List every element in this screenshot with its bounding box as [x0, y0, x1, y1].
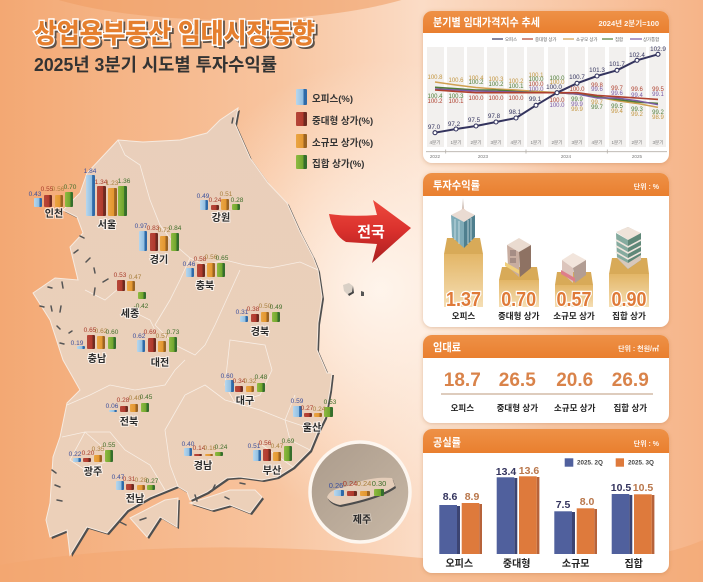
region: 경북: 0.50: [259, 303, 272, 310]
category labels: 오피스: [452, 311, 475, 321]
region: 울산: 0.27: [301, 405, 314, 412]
legend: 오피스(%): [312, 94, 353, 105]
region: 부산: 부산: [263, 464, 281, 477]
bar chart: 10.5: [633, 482, 653, 494]
region: 부산: 0.51: [248, 443, 261, 450]
region: 충북: 0.56: [205, 254, 218, 261]
region: 세종: [114, 272, 149, 320]
bar chart: 8.0: [580, 496, 594, 508]
legend: 집합 상가(%): [312, 158, 364, 170]
region: 경북: 0.31: [236, 309, 249, 316]
region: 대전: 대전: [151, 356, 169, 369]
region: 광주: 0.22: [69, 451, 82, 458]
chart value labels: 100.0: [569, 87, 585, 93]
panel: 제주 inset: 0.24: [343, 479, 357, 488]
value: 중대형 상가: 0.70: [501, 289, 536, 311]
chart value labels: 101.3: [589, 67, 605, 74]
chart value labels: 99.9: [571, 97, 583, 103]
region: 부산: 0.56: [259, 440, 272, 447]
chart value labels: 100.0: [528, 82, 544, 88]
region: 충남: [71, 327, 119, 365]
bar legend: 2025. 3Q: [628, 460, 654, 466]
region: 충북: 0.46: [183, 261, 196, 268]
chart legend: 집합: [615, 36, 623, 42]
chart value labels: 100.0: [549, 98, 565, 104]
value: 소규모 상가: 0.57: [556, 289, 592, 311]
category labels: 소규모 상가: [553, 311, 595, 321]
chart value labels: 99.7: [591, 105, 603, 111]
region: 경기: 0.84: [169, 225, 182, 232]
chart value labels: 100.0: [508, 96, 524, 102]
category labels: 오피스: [451, 403, 474, 413]
region: 강원: 0.28: [231, 197, 244, 204]
region: 경기: 0.72: [158, 227, 171, 234]
chart value labels: 100.1: [528, 73, 544, 79]
quarter axis: [426, 139, 667, 159]
chart value labels: 100.2: [427, 99, 443, 105]
region: 전북: 전북: [120, 416, 138, 428]
panel: 제주 inset: 0.30: [372, 479, 386, 488]
heading: 투자수익률: [433, 179, 480, 192]
category labels: 집합 상가: [613, 403, 647, 413]
chart value labels: 99.6: [631, 87, 643, 93]
region: 서울: 1.36: [118, 178, 131, 185]
region: 광주: [69, 442, 116, 478]
region: 울산: 울산: [303, 421, 321, 434]
chart value labels: 99.4: [611, 109, 623, 115]
icon: office tower: [451, 198, 475, 248]
chart value labels: 97.0: [428, 124, 441, 131]
category labels: 소규모 상가: [554, 403, 596, 413]
quarter axis: 4분기: [510, 139, 522, 146]
rent values: 18.7: [444, 370, 481, 391]
unit note: 단위 : %: [634, 439, 660, 448]
unit note: 단위 : %: [634, 182, 660, 191]
region: 전북: 0.28: [117, 397, 130, 404]
region: 충남: 0.62: [95, 328, 108, 335]
chart value labels: 99.2: [631, 112, 643, 118]
chart value labels: 99.8: [591, 83, 603, 89]
arrow: 전국: 전국: [357, 224, 385, 241]
bar chart: 7.5: [556, 499, 570, 511]
region: 경남: [182, 441, 228, 472]
region: 경남: 0.16: [204, 445, 217, 452]
region: 서울: 1.34: [95, 179, 108, 186]
panel: 투자수익률: [423, 173, 669, 327]
rent values: [444, 370, 649, 391]
region: 전북: [106, 394, 153, 428]
category labels: 집합 상가: [612, 311, 646, 321]
chart value labels: 100.4: [427, 94, 443, 100]
chart value labels: 99.9: [571, 107, 583, 113]
region: 전남: 0.47: [112, 474, 125, 481]
region: 대전: 0.69: [144, 329, 157, 336]
quarter axis: 3분기: [571, 139, 583, 146]
chart value labels: 99.5: [652, 87, 664, 93]
region: 경북: 경북: [251, 326, 269, 338]
quarter axis: 2024: [561, 154, 572, 159]
region: 전북: 0.45: [140, 394, 153, 401]
region: 인천: 0.55: [41, 186, 54, 193]
region: 대전: [133, 329, 180, 369]
rent values: 20.6: [556, 370, 593, 391]
region: 서울: [84, 168, 131, 231]
quarter axis: 1분기: [450, 139, 462, 146]
quarter axis: 2022: [430, 154, 441, 159]
panel: 공실률: [423, 429, 669, 573]
region: 부산: 0.69: [282, 438, 295, 445]
quarter axis: 2분기: [551, 139, 563, 146]
chart value labels: 100.8: [427, 75, 443, 81]
chart value labels: 99.2: [652, 110, 664, 116]
chart value labels: 100.1: [508, 84, 524, 90]
region: 경북: 0.49: [270, 304, 283, 311]
region: 서울: 1.23: [106, 180, 119, 187]
region: 대구: 0.32: [244, 378, 257, 385]
arrow: 전국: [329, 200, 411, 263]
rent values: 26.5: [499, 370, 536, 391]
bar chart: 8.6: [443, 491, 457, 503]
region: 충북: 충북: [196, 280, 214, 292]
chart legend: [492, 36, 659, 43]
chart value labels: [427, 46, 666, 131]
title: 상업용부동산 임대시장동향: [36, 21, 317, 51]
category labels: [452, 311, 646, 321]
region: 울산: [291, 398, 337, 434]
chart legend: 소규모 상가: [576, 36, 597, 43]
chart value labels: 102.4: [629, 52, 645, 59]
region: 부산: [248, 438, 295, 477]
title: 상업용부동산 임대시장동향: [34, 19, 315, 49]
chart value labels: 100.2: [468, 80, 484, 86]
unit note: 2024년 2분기=100: [598, 18, 659, 28]
panel: 임대료: [423, 335, 669, 423]
panel: 제주 inset: 제주: [353, 513, 371, 526]
bar chart: 13.4: [496, 466, 516, 478]
region: 강원: 강원: [212, 211, 230, 224]
chart value labels: 99.1: [652, 92, 664, 98]
chart value labels: 100.2: [488, 82, 504, 88]
category labels: 중대형: [503, 557, 531, 570]
region: 부산: 0.47: [271, 443, 284, 450]
region: 경기: 경기: [150, 253, 168, 266]
rent values: 26.9: [612, 370, 649, 391]
chart value labels: 100.0: [546, 84, 562, 91]
chart value labels: 100.4: [468, 76, 484, 82]
icon: mid-size shop building: [505, 238, 531, 277]
category labels: 집합: [624, 557, 643, 570]
chart value labels: 99.4: [631, 93, 643, 99]
region: 경북: 0.38: [247, 306, 260, 313]
region: 강원: 0.51: [220, 191, 233, 198]
region: 충남: 0.65: [84, 327, 97, 334]
line chart: [433, 52, 660, 135]
bar legend: 2025. 2Q: [577, 460, 603, 466]
region: 충북: [183, 254, 229, 292]
chart value labels: 100.0: [488, 96, 504, 102]
region: 전남: 전남: [126, 492, 144, 505]
icon: collective building: [616, 227, 641, 269]
icon: Ulleung and Dokdo islands: [343, 283, 364, 296]
bar chart: [439, 465, 654, 554]
bar legend: [565, 458, 654, 467]
chart value labels: 100.0: [528, 87, 544, 93]
heading: 임대료: [433, 340, 461, 354]
region: 전남: 0.27: [146, 478, 159, 485]
region: 세종: 세종: [121, 307, 139, 320]
bar chart: 13.6: [519, 465, 539, 477]
chart value labels: 100.1: [448, 99, 464, 105]
legend: [296, 89, 373, 170]
category labels: 소규모: [562, 558, 590, 570]
region: 대구: 0.34: [233, 378, 246, 385]
chart value labels: 98.1: [509, 109, 522, 116]
chart legend: 중대형 상가: [535, 36, 556, 43]
chart value labels: 100.6: [448, 78, 464, 84]
chart value labels: 97.5: [468, 117, 481, 124]
region: 세종: 0.47: [129, 274, 142, 281]
chart value labels: 100.0: [549, 80, 565, 86]
map of South Korea: [33, 108, 334, 557]
chart value labels: 100.7: [569, 74, 585, 81]
chart value labels: 99.6: [591, 87, 603, 93]
chart legend: 상가통합: [643, 36, 659, 43]
region: 광주: 0.55: [103, 442, 116, 449]
region: 경기: 0.97: [135, 223, 148, 230]
category labels: 중대형 상가: [497, 403, 538, 413]
panel: 분기별 임대가격지수 추세: [423, 11, 669, 163]
heading: 공실률: [433, 436, 461, 449]
region: 경남: 0.40: [182, 441, 195, 448]
region: 경북: [236, 303, 283, 338]
icon: small shop building: [561, 253, 586, 283]
region: 대전: 0.73: [167, 329, 180, 336]
bar chart: 8.9: [465, 491, 479, 503]
region: 광주: 0.20: [82, 450, 95, 457]
region: 울산: 0.53: [324, 399, 337, 406]
chart value labels: 99.9: [571, 102, 583, 108]
chart value labels: 101.7: [609, 61, 625, 68]
region: 충북: 0.58: [194, 256, 207, 263]
chart value labels: 100.0: [549, 103, 565, 109]
region: 경남: 0.24: [215, 444, 228, 451]
quarter axis: 4분기: [591, 139, 603, 146]
subtitle: 2025년 3분기 시도별 투자수익률: [34, 55, 277, 75]
region: 세종: -0.42: [134, 303, 149, 310]
region: 충북: 0.65: [216, 255, 229, 262]
region: 서울: 1.84: [84, 168, 97, 175]
value: 오피스: 1.37: [446, 289, 481, 311]
region: 광주: 0.35: [92, 446, 105, 453]
chart value labels: 97.2: [448, 121, 461, 128]
chart value labels: 100.3: [488, 77, 504, 83]
quarter axis: 4분기: [429, 139, 441, 146]
region: 서울: 서울: [98, 218, 116, 231]
title: 상업용부동산 임대시장동향: [34, 19, 315, 49]
heading: 분기별 임대가격지수 추세: [433, 15, 540, 29]
region: 경기: [135, 223, 182, 266]
region: 전북: 0.06: [106, 403, 119, 410]
chart value labels: 100.0: [549, 76, 565, 82]
region: 경기: 0.83: [147, 225, 160, 232]
chart value labels: 100.0: [528, 77, 544, 83]
chart value labels: 99.1: [529, 96, 542, 103]
podiums: [444, 238, 649, 307]
region: 전남: 0.31: [123, 476, 136, 483]
region: 전남: [112, 474, 159, 505]
legend: 소규모 상가(%): [312, 137, 373, 149]
chart value labels: 100.0: [468, 96, 484, 102]
category labels: [451, 403, 647, 413]
quarter axis: 2분기: [631, 139, 643, 146]
category labels: [445, 557, 643, 570]
chart value labels: 102.9: [650, 46, 666, 53]
region: 전북: 0.40: [129, 395, 142, 402]
chart value labels: 100.2: [508, 79, 524, 85]
region: 강원: [197, 191, 244, 224]
chart value labels: 99.7: [591, 100, 603, 106]
chart value labels: 99.6: [611, 91, 623, 97]
region: 강원: 0.49: [197, 193, 210, 200]
region: 충남: 0.19: [71, 340, 84, 347]
chart value labels: 99.3: [631, 107, 643, 113]
panel: 제주 inset: [310, 442, 410, 542]
region: 경남: 0.14: [193, 445, 206, 452]
region: 충남: 0.60: [106, 329, 119, 336]
chart value labels: 97.8: [488, 113, 501, 120]
region: 대전: 0.62: [133, 333, 146, 340]
chart value labels: 100.3: [448, 94, 464, 100]
chart value labels: 99.7: [611, 86, 623, 92]
quarter axis: 2023: [478, 154, 489, 159]
region: 광주: 광주: [84, 466, 102, 478]
region: 충남: 충남: [88, 352, 106, 365]
region: 대구: 대구: [236, 394, 254, 407]
region: 인천: 인천: [45, 207, 63, 220]
region: 대전: 0.57: [156, 333, 169, 340]
value: 집합 상가: 0.90: [612, 289, 646, 311]
region: 인천: [29, 184, 77, 220]
quarter axis: 2025: [632, 154, 643, 159]
region: 울산: 0.24: [313, 406, 326, 413]
chart legend: 오피스: [505, 36, 517, 43]
quarter axis: 2분기: [470, 139, 482, 146]
category labels: 중대형 상가: [498, 311, 540, 321]
region: 강원: 0.24: [209, 197, 222, 204]
bar chart: 10.5: [611, 482, 631, 494]
region: 전남: 0.28: [135, 477, 148, 484]
chart value labels: 99.5: [611, 104, 623, 110]
legend: 중대형 상가(%): [312, 115, 373, 127]
region: 대구: [221, 373, 268, 407]
category labels: 오피스: [445, 558, 473, 570]
region: 대구: 0.60: [221, 373, 234, 380]
quarter axis: 3분기: [652, 139, 664, 146]
region: 세종: 0.53: [114, 272, 127, 279]
chart value labels: 98.9: [652, 115, 664, 121]
region: 인천: 0.70: [64, 184, 77, 191]
unit note: 단위 : 천원/㎡: [618, 344, 659, 353]
region: 경남: 경남: [194, 459, 212, 472]
quarter axis: 3분기: [490, 139, 502, 146]
region: 인천: 0.43: [29, 191, 42, 198]
region: 인천: 0.56: [52, 186, 65, 193]
quarter axis: 1분기: [611, 139, 623, 146]
panel: 제주 inset: 0.24: [357, 479, 371, 488]
quarter axis: 1분기: [530, 139, 542, 146]
region: 대구: 0.48: [255, 374, 268, 381]
region: 울산: 0.59: [291, 398, 304, 405]
panel: 제주 inset: 0.26: [329, 481, 343, 490]
